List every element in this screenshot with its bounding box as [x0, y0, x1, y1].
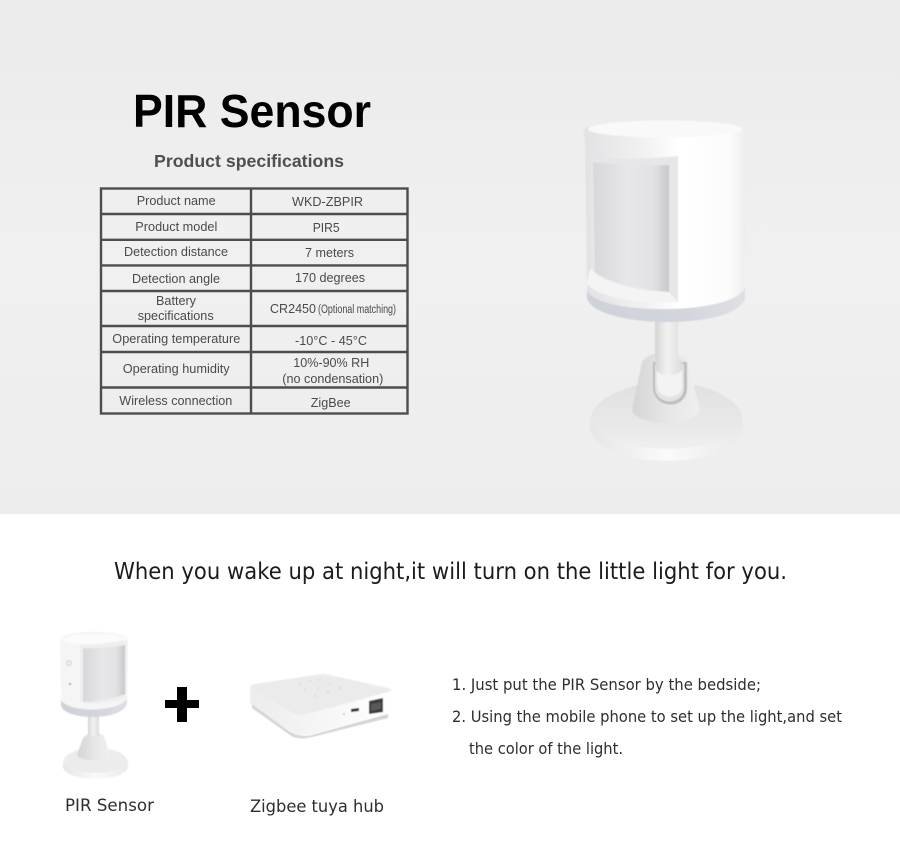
step 2 — [452, 707, 842, 758]
row: product name — [137, 193, 363, 209]
row: battery specifications: (Optional matching) — [318, 304, 396, 316]
stem — [655, 318, 682, 375]
lens frame — [591, 156, 678, 302]
caption: PIR Sensor: PIR Sensor — [65, 796, 154, 816]
specification table — [101, 188, 408, 414]
step 2: 2. Using the mobile phone to set up the light,and set — [452, 707, 842, 726]
hub top — [250, 674, 391, 714]
row: battery specifications: CR2450 — [270, 301, 316, 316]
small PIR sensor image — [60, 632, 128, 779]
indicators — [67, 661, 71, 685]
row: battery specifications: specifications — [138, 308, 214, 323]
row: wireless connection: ZigBee — [311, 395, 351, 410]
row: product model: Product model — [135, 219, 217, 234]
instructions list — [452, 675, 842, 758]
row: detection angle: Detection angle — [132, 271, 220, 286]
row: product name: WKD-ZBPIR — [292, 194, 363, 209]
row: product name: Product name — [137, 193, 216, 208]
row: operating temperature — [112, 331, 367, 348]
body — [60, 632, 128, 710]
speaker holes — [299, 679, 341, 697]
row: operating humidity: 10%-90% RH — [293, 355, 369, 370]
plus sign — [165, 687, 199, 722]
lens — [593, 162, 669, 292]
row: detection distance: 7 meters — [305, 245, 354, 260]
row: operating temperature: -10°C - 45°C — [295, 333, 367, 348]
row: wireless connection: Wireless connection — [119, 393, 232, 408]
title: PIR Sensor — [133, 85, 371, 137]
large PIR sensor illustration — [584, 120, 748, 461]
base disc — [63, 748, 128, 779]
lower lip — [587, 268, 678, 303]
status LED — [343, 713, 345, 715]
row: battery specifications — [138, 293, 396, 323]
row: detection distance: Detection distance — [124, 244, 228, 259]
ethernet port — [369, 698, 383, 714]
mount — [632, 353, 700, 423]
row: operating humidity — [123, 355, 383, 386]
caption: Zigbee tuya hub: Zigbee tuya hub — [250, 797, 384, 817]
bottom heading: When you wake up at night,it will turn on the little light for you. — [114, 557, 787, 585]
hub lower edge — [252, 704, 388, 738]
body — [585, 135, 748, 309]
step 2: the color of the light. — [469, 739, 623, 758]
top lid — [584, 120, 748, 146]
row: product model: PIR5 — [313, 220, 340, 235]
USB port — [351, 708, 359, 712]
grey band — [587, 282, 745, 322]
row: detection angle: 170 degrees — [295, 270, 365, 285]
row: operating humidity: (no condensation) — [282, 371, 383, 386]
row: detection angle — [132, 270, 365, 286]
hub illustration — [250, 674, 392, 738]
stem — [88, 712, 99, 736]
row: operating humidity: Operating humidity — [123, 361, 230, 376]
row: operating temperature: Operating temperature — [112, 331, 240, 346]
row: wireless connection — [119, 393, 351, 410]
mount — [77, 733, 110, 760]
base disc — [590, 382, 743, 461]
window frame — [80, 640, 127, 704]
row: product model — [135, 219, 340, 235]
row: detection distance — [124, 244, 354, 260]
subheading: product specifications: Product specifications — [154, 151, 344, 171]
top panel background — [0, 0, 900, 514]
step 1: 1. Just put the PIR Sensor by the bedside; — [452, 675, 761, 694]
window lens — [83, 645, 125, 702]
grey band — [61, 696, 127, 717]
hub left and front faces — [250, 688, 392, 735]
row: battery specifications: Battery — [156, 293, 197, 308]
